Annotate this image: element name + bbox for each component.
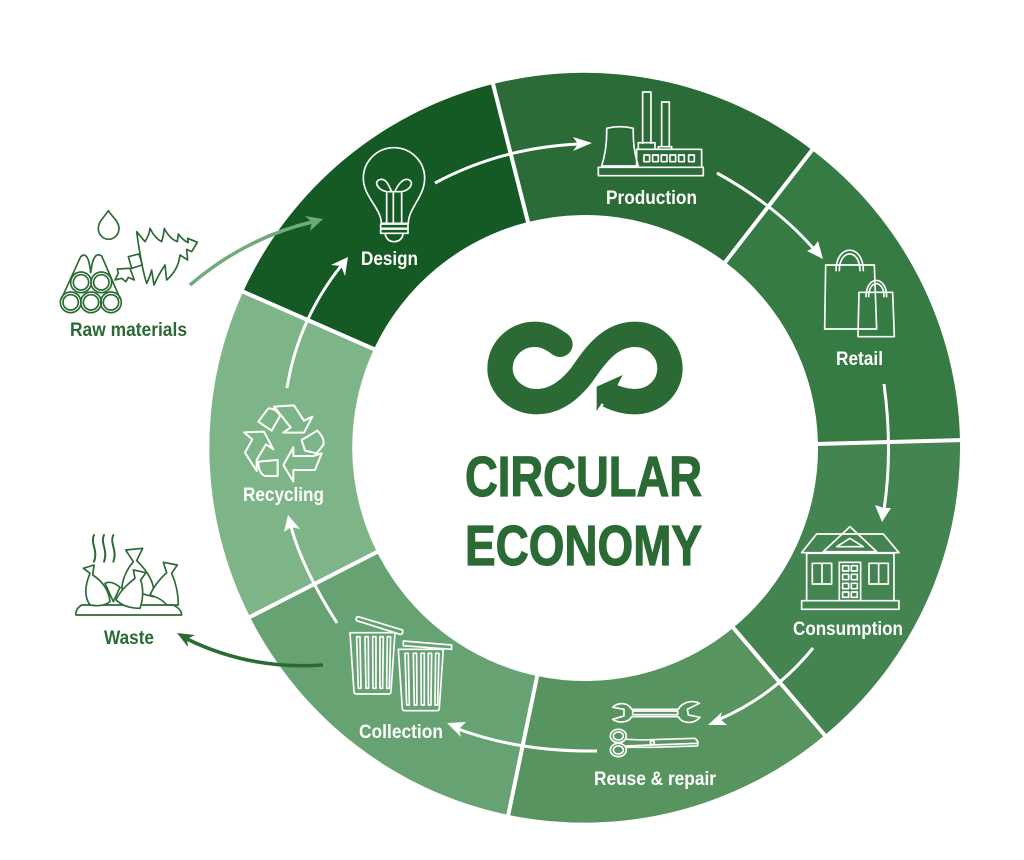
label: waste: Waste bbox=[104, 628, 154, 649]
label: reuse and repair: Reuse & repair bbox=[594, 769, 717, 790]
icon: house bbox=[802, 527, 899, 609]
label: raw materials: Raw materials bbox=[70, 319, 187, 341]
label: production: Production bbox=[606, 188, 697, 209]
arrow: collection to waste bbox=[177, 633, 323, 666]
segment: retail bbox=[725, 150, 960, 444]
title bbox=[465, 445, 702, 578]
icon: factory bbox=[598, 92, 703, 176]
icon: trash bins bbox=[350, 617, 452, 711]
arrow: reuse to collection bbox=[447, 722, 597, 751]
icon: raw materials bbox=[60, 211, 197, 313]
segment: recycling bbox=[209, 292, 377, 617]
label: retail: Retail bbox=[836, 349, 883, 370]
arrow: production to retail bbox=[717, 173, 823, 259]
icon: shopping bags bbox=[825, 250, 894, 337]
label: consumption: Consumption bbox=[793, 619, 903, 640]
arrow: recycling to design bbox=[287, 257, 348, 388]
segment: collection bbox=[250, 552, 537, 815]
icon: wrench and scissors bbox=[610, 702, 700, 757]
label: collection: Collection bbox=[359, 722, 443, 743]
infinity logo bbox=[500, 332, 670, 412]
segment: design bbox=[243, 84, 528, 349]
arrow: consumption to reuse bbox=[708, 648, 813, 725]
segment: production bbox=[493, 73, 812, 262]
icon: waste bags bbox=[76, 535, 182, 615]
arrow: design to production bbox=[435, 137, 592, 183]
arrow: retail to consumption bbox=[875, 384, 891, 522]
segment: consumption bbox=[733, 440, 960, 735]
circular ring of seven segments bbox=[209, 73, 964, 823]
label: recycling: Recycling bbox=[243, 485, 324, 506]
arrow: raw materials into design bbox=[190, 216, 323, 285]
segment: reuse and repair bbox=[508, 628, 825, 823]
icon: recycling symbol bbox=[244, 405, 324, 482]
label: design: Design bbox=[361, 249, 418, 270]
title: CIRCULAR bbox=[465, 445, 702, 509]
arrow: collection to recycling bbox=[284, 515, 337, 623]
title: ECONOMY bbox=[465, 514, 702, 578]
icon: light bulb bbox=[363, 148, 425, 242]
